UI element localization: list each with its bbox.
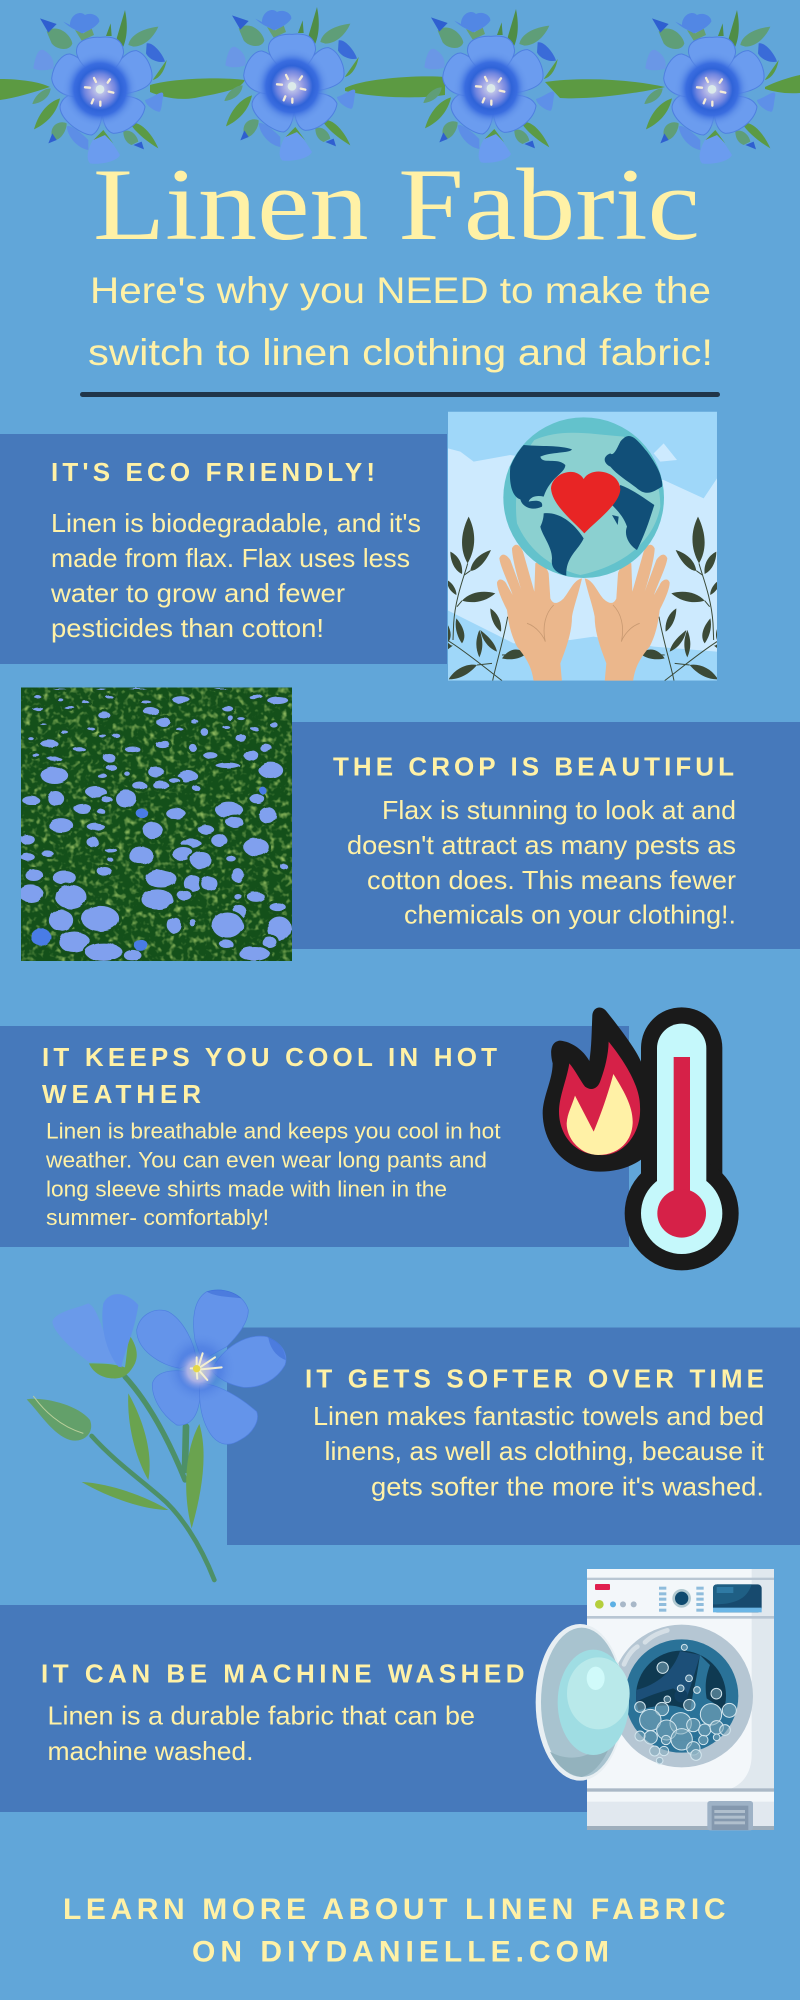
heading: eco friendly: IT'S ECO FRIENDLY! bbox=[51, 457, 375, 487]
body: softer over time: gets softer the more it's washed. bbox=[371, 1472, 764, 1502]
panel: softer over time bbox=[227, 1328, 800, 1545]
body: crop is beautiful: chemicals on your clothing!. bbox=[404, 900, 736, 930]
icon: red heart bbox=[551, 471, 620, 533]
body: crop is beautiful bbox=[347, 795, 736, 930]
subtitle bbox=[88, 270, 713, 373]
heading: machine washed: IT CAN BE MACHINE WASHED bbox=[41, 1659, 524, 1689]
body: crop is beautiful: doesn't attract as many pests as bbox=[347, 830, 736, 860]
icon: flame and thermometer bbox=[543, 1007, 739, 1270]
call to action footer: LEARN MORE ABOUT LINEN FABRIC bbox=[63, 1893, 726, 1926]
illustration: washing machine bbox=[536, 1569, 774, 1830]
body: crop is beautiful: cotton does. This means fewer bbox=[367, 865, 736, 895]
flower garland banner bbox=[0, 7, 800, 164]
call to action footer bbox=[63, 1893, 726, 1969]
panel: crop is beautiful bbox=[292, 722, 800, 949]
body: keeps you cool: long sleeve shirts made with linen in the bbox=[46, 1177, 447, 1202]
panel: keeps you cool bbox=[0, 1026, 629, 1247]
body: softer over time: linens, as well as clothing, because it bbox=[324, 1436, 765, 1466]
heading: softer over time: IT GETS SOFTER OVER TIME bbox=[305, 1364, 764, 1394]
heading: keeps you cool bbox=[42, 1042, 497, 1109]
body: eco friendly: water to grow and fewer bbox=[50, 578, 345, 608]
panel: machine washed bbox=[0, 1605, 587, 1812]
body: eco friendly bbox=[50, 508, 421, 643]
body: machine washed bbox=[48, 1701, 475, 1766]
header divider bbox=[80, 392, 720, 397]
title: Linen Fabric bbox=[93, 148, 700, 262]
body: eco friendly: Linen is biodegradable, and it's bbox=[51, 508, 421, 538]
body: keeps you cool bbox=[45, 1118, 500, 1230]
body: crop is beautiful: Flax is stunning to look at and bbox=[382, 795, 736, 825]
body: machine washed: machine washed. bbox=[48, 1736, 254, 1766]
body: eco friendly: made from flax. Flax uses less bbox=[51, 543, 410, 573]
body: eco friendly: pesticides than cotton! bbox=[51, 613, 324, 643]
illustration: blue flax flower bbox=[27, 1290, 286, 1580]
heading: keeps you cool: WEATHER bbox=[42, 1079, 201, 1109]
image: flax field photo bbox=[18, 687, 293, 962]
body: keeps you cool: weather. You can even wear long pants and bbox=[45, 1148, 487, 1172]
heading: crop is beautiful: THE CROP IS BEAUTIFUL bbox=[333, 752, 734, 782]
subtitle: switch to linen clothing and fabric! bbox=[88, 332, 713, 373]
body: keeps you cool: summer- comfortably! bbox=[46, 1205, 269, 1230]
panel: eco friendly bbox=[0, 434, 447, 664]
call to action footer: ON DIYDANIELLE.COM bbox=[192, 1936, 609, 1969]
body: machine washed: Linen is a durable fabric that can be bbox=[48, 1701, 475, 1731]
body: softer over time bbox=[313, 1401, 765, 1502]
heading: keeps you cool: IT KEEPS YOU COOL IN HOT bbox=[42, 1042, 497, 1072]
image: hands holding globe bbox=[447, 412, 720, 682]
subtitle: Here's why you NEED to make the bbox=[90, 270, 711, 311]
body: softer over time: Linen makes fantastic towels and bed bbox=[313, 1401, 764, 1431]
body: keeps you cool: Linen is breathable and keeps you cool in hot bbox=[46, 1118, 500, 1143]
